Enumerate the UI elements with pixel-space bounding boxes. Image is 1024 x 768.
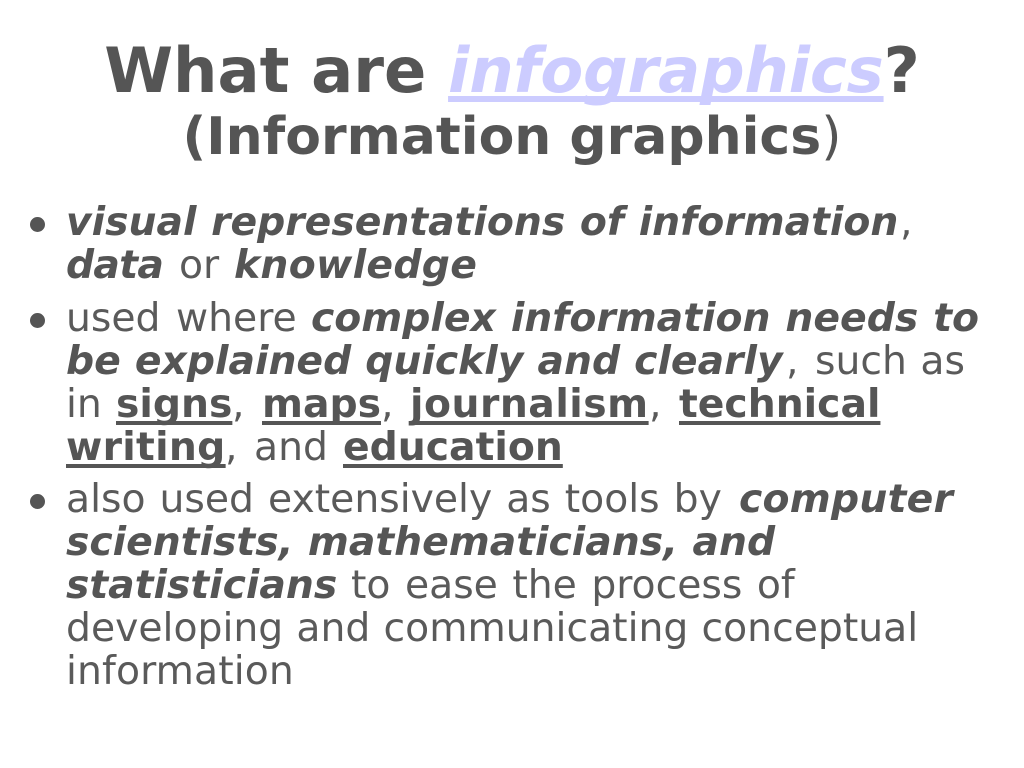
- bullet 2 text: ,: [225, 425, 238, 470]
- bullet 1 text: visual representations of information: [66, 200, 898, 245]
- bullet 2 text: ,: [786, 339, 798, 384]
- bullet 2 text: ,: [232, 382, 244, 427]
- bullet 1 text: [66, 200, 912, 288]
- bullet 2 text: signs: [116, 382, 232, 427]
- bullet 1 text: knowledge: [234, 243, 477, 288]
- bullet 3 text: statisticians: [66, 563, 337, 608]
- bullet 1 text: data: [66, 243, 163, 288]
- bullet 2 text: education: [343, 425, 563, 470]
- bullet 2 text: complex information needs to: [311, 296, 979, 341]
- bullet 1 text: or: [179, 243, 219, 288]
- bullet 2 text: ,: [381, 382, 394, 427]
- title: What are infographics?: [104, 34, 920, 107]
- bullet 2 text: journalism: [410, 382, 649, 427]
- bullet 3 text: computer: [739, 477, 953, 522]
- bullet 3 text: scientists, mathematicians, and: [66, 520, 775, 565]
- bullet 3 text: [66, 477, 955, 694]
- subtitle: (Information graphics): [182, 107, 842, 167]
- bullet 2 text: and: [254, 425, 328, 470]
- bullet 2 text: be explained quickly and clearly: [66, 339, 783, 384]
- bullet 2 text: such as: [815, 339, 965, 384]
- bullet 1 marker: [30, 216, 45, 232]
- bullet 2 marker: [30, 312, 45, 328]
- bullet 2 text: [66, 296, 979, 470]
- bullet 3 text: information: [66, 649, 294, 694]
- bullet 2 text: technical: [679, 382, 880, 427]
- bullet 2 text: maps: [262, 382, 381, 427]
- bullet 1 text: ,: [900, 200, 912, 245]
- bullet 3 text: also used extensively as tools by: [66, 477, 722, 522]
- bullet 2 text: used where: [66, 296, 297, 341]
- bullet 2 text: in: [66, 382, 102, 427]
- bullet 2 text: ,: [649, 382, 662, 427]
- bullet 3 text: to ease the process of: [351, 563, 795, 608]
- bullet 3 marker: [30, 494, 45, 508]
- bullet 3 text: developing and communicating conceptual: [66, 606, 918, 651]
- bullet 2 text: writing: [66, 425, 226, 470]
